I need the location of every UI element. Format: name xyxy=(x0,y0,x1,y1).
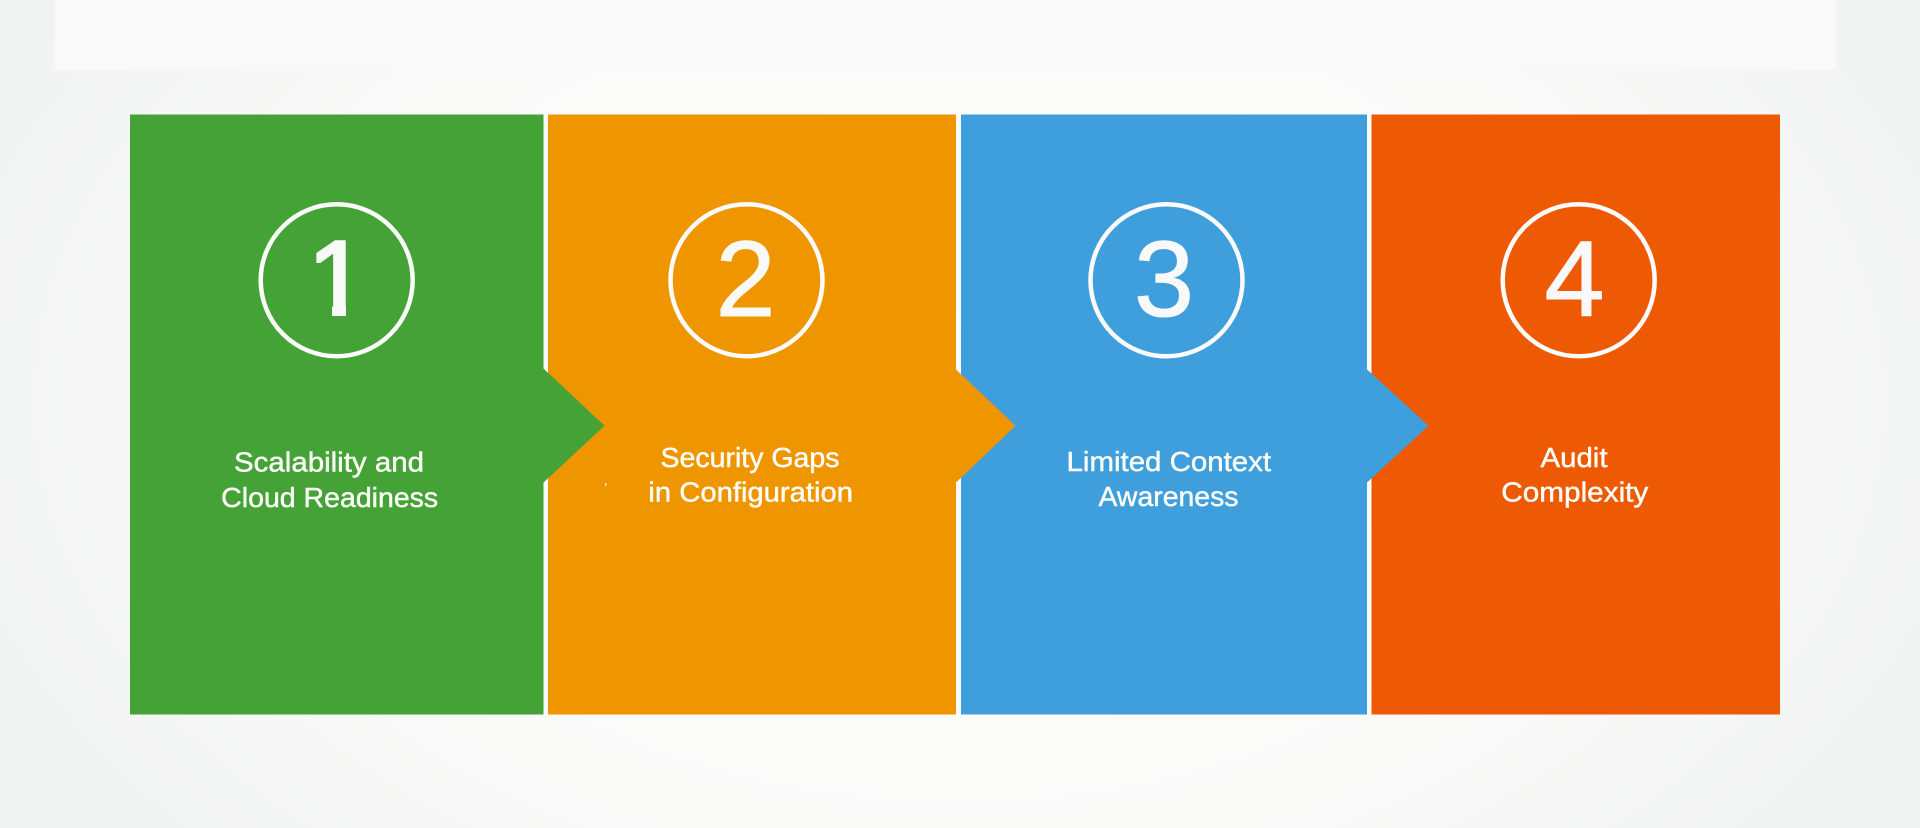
icon: number 2 in circle xyxy=(670,204,822,356)
panel 2 label: in Configuration xyxy=(648,476,853,508)
top blank band xyxy=(55,0,1836,70)
small speck on orange panel xyxy=(605,483,606,486)
icon: number 4 in circle: 4 xyxy=(1544,218,1605,339)
panel 1 label: Cloud Readiness xyxy=(221,482,438,513)
icon: number 2 in circle: 2 xyxy=(715,218,776,339)
panel 3 label: Awareness xyxy=(1098,481,1238,512)
panel 1 label xyxy=(221,446,438,513)
panel 1: Scalability and Cloud Readiness xyxy=(130,114,544,714)
panel 4 label: Audit xyxy=(1540,442,1608,473)
panel 3 label xyxy=(1067,446,1271,512)
arrow: orange to blue xyxy=(956,369,1016,483)
panel 1 label: Scalability and xyxy=(234,446,424,478)
arrow: green to orange xyxy=(543,368,604,483)
icon: number 1 in circle: 1 xyxy=(307,218,368,339)
icon: number 4 in circle xyxy=(1503,204,1655,356)
icon: number 3 in circle: 3 xyxy=(1134,218,1194,339)
panel 3 label: Limited Context xyxy=(1067,446,1271,477)
panel 2 label xyxy=(648,442,853,508)
panel 4 label xyxy=(1501,442,1648,508)
arrow: blue to red xyxy=(1366,369,1428,483)
panel 4 label: Complexity xyxy=(1501,476,1648,508)
panel 3: Limited Context Awareness xyxy=(961,114,1367,714)
icon: number 1 in circle xyxy=(261,204,413,356)
panel 2: Security Gaps in Configuration xyxy=(548,114,956,714)
panel 4: Audit Complexity xyxy=(1372,114,1780,714)
panel 2 label: Security Gaps xyxy=(660,442,840,473)
icon: number 3 in circle xyxy=(1090,204,1242,356)
